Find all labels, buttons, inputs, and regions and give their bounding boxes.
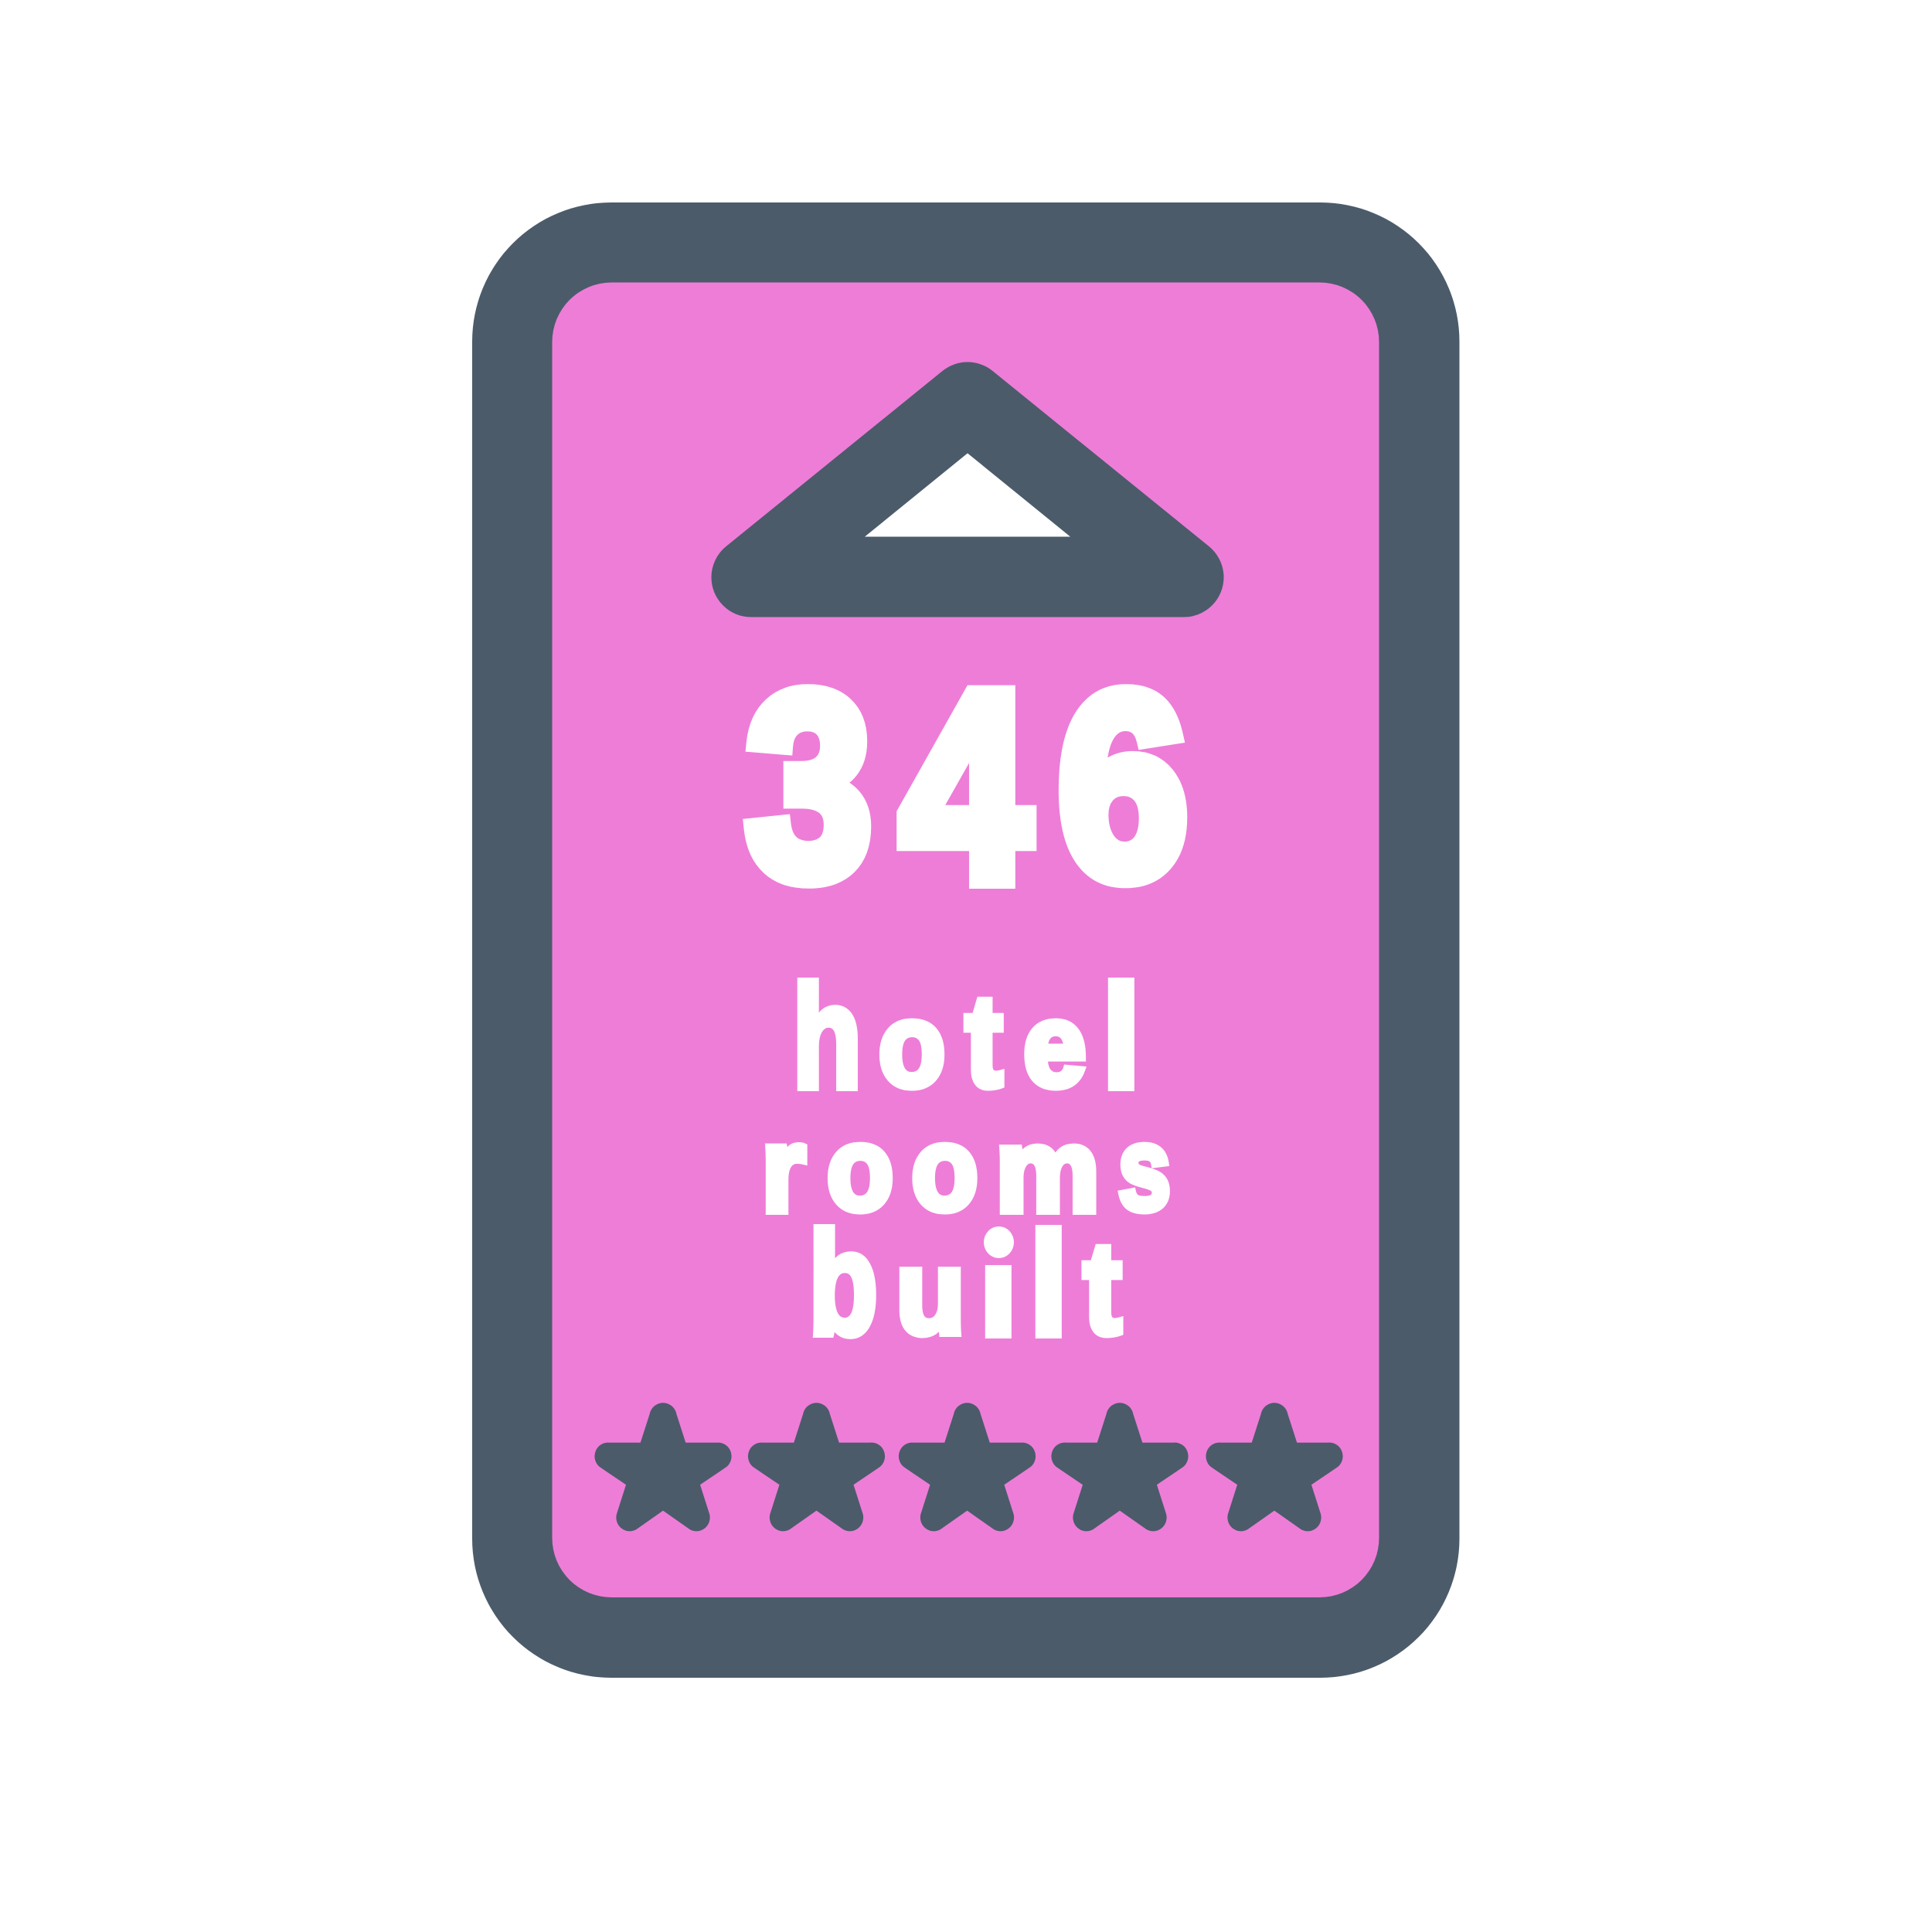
label: rooms: o: [827, 1103, 893, 1235]
label: hotel: t: [965, 968, 1002, 1114]
icon: star 3: [899, 1403, 1036, 1531]
round dot of the i: [984, 1226, 1014, 1258]
word: built: l: [1029, 1203, 1068, 1366]
mask over the square dot of the i: [980, 1217, 1017, 1265]
label: rooms: s: [1118, 1103, 1171, 1235]
label: rooms: o: [912, 1103, 978, 1235]
label: hotel: l: [1102, 956, 1141, 1119]
word: built: b: [808, 1202, 878, 1366]
dark triangle outline: [751, 402, 1184, 577]
label: hotel: h: [792, 956, 862, 1119]
label: rooms: m: [995, 1104, 1100, 1236]
word: built: t: [1083, 1215, 1121, 1361]
card pink inner panel: [552, 283, 1379, 1597]
icon: star 5: [1206, 1403, 1343, 1531]
five star rating: [594, 1403, 1343, 1531]
icon: star 4: [1051, 1403, 1189, 1531]
white triangle cut-out: [865, 453, 1070, 536]
label: hotel: e: [1023, 979, 1086, 1111]
icon: star 1: [594, 1403, 732, 1531]
icon: door hanger roof triangle: [751, 402, 1184, 577]
icon: star 2: [748, 1403, 885, 1531]
label: rooms: r: [761, 1103, 805, 1237]
label: hotel: o: [879, 979, 945, 1111]
big number 346: 6: [1059, 639, 1187, 932]
word: built: u: [896, 1226, 965, 1359]
card outer frame: [472, 202, 1459, 1678]
word: built: i: [979, 1203, 1018, 1366]
label: built: [808, 1202, 1121, 1366]
panel: hotel door hanger card: [472, 202, 1459, 1678]
big number 346: 3: [747, 639, 872, 932]
big number 346: 4: [901, 636, 1031, 937]
